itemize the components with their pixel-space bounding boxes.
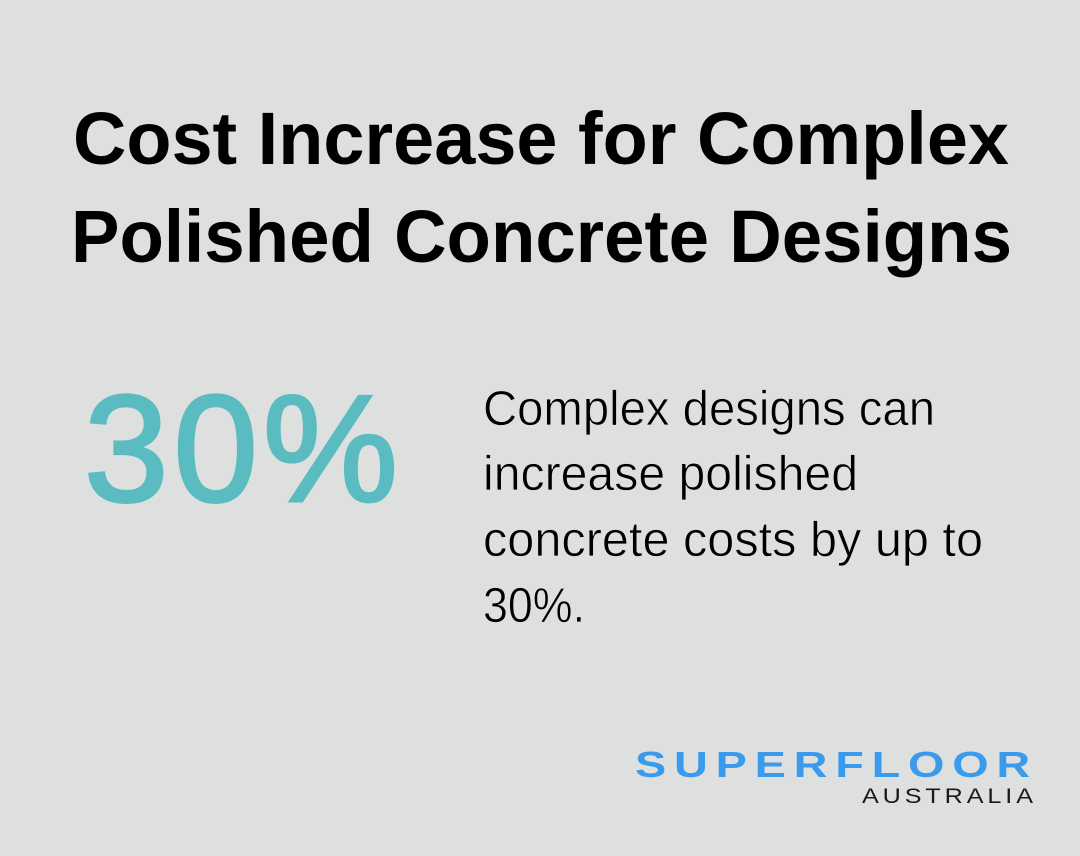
logo: Superfloor Australia: AUSTRALIA	[862, 784, 1034, 808]
title: Cost Increase for Complex	[73, 97, 1009, 180]
logo: Superfloor Australia: SUPERFLOOR	[635, 744, 1030, 785]
title: Polished Concrete Designs	[71, 195, 1012, 278]
big statistic: 30%: 30%	[84, 364, 398, 534]
description text: concrete costs by up to	[483, 513, 983, 567]
logo: Superfloor Australia	[635, 744, 1034, 808]
description text	[483, 382, 983, 633]
title	[71, 97, 1012, 278]
description text: increase polished	[483, 447, 858, 501]
description text: Complex designs can	[483, 382, 935, 436]
description text: 30%.	[483, 579, 585, 633]
